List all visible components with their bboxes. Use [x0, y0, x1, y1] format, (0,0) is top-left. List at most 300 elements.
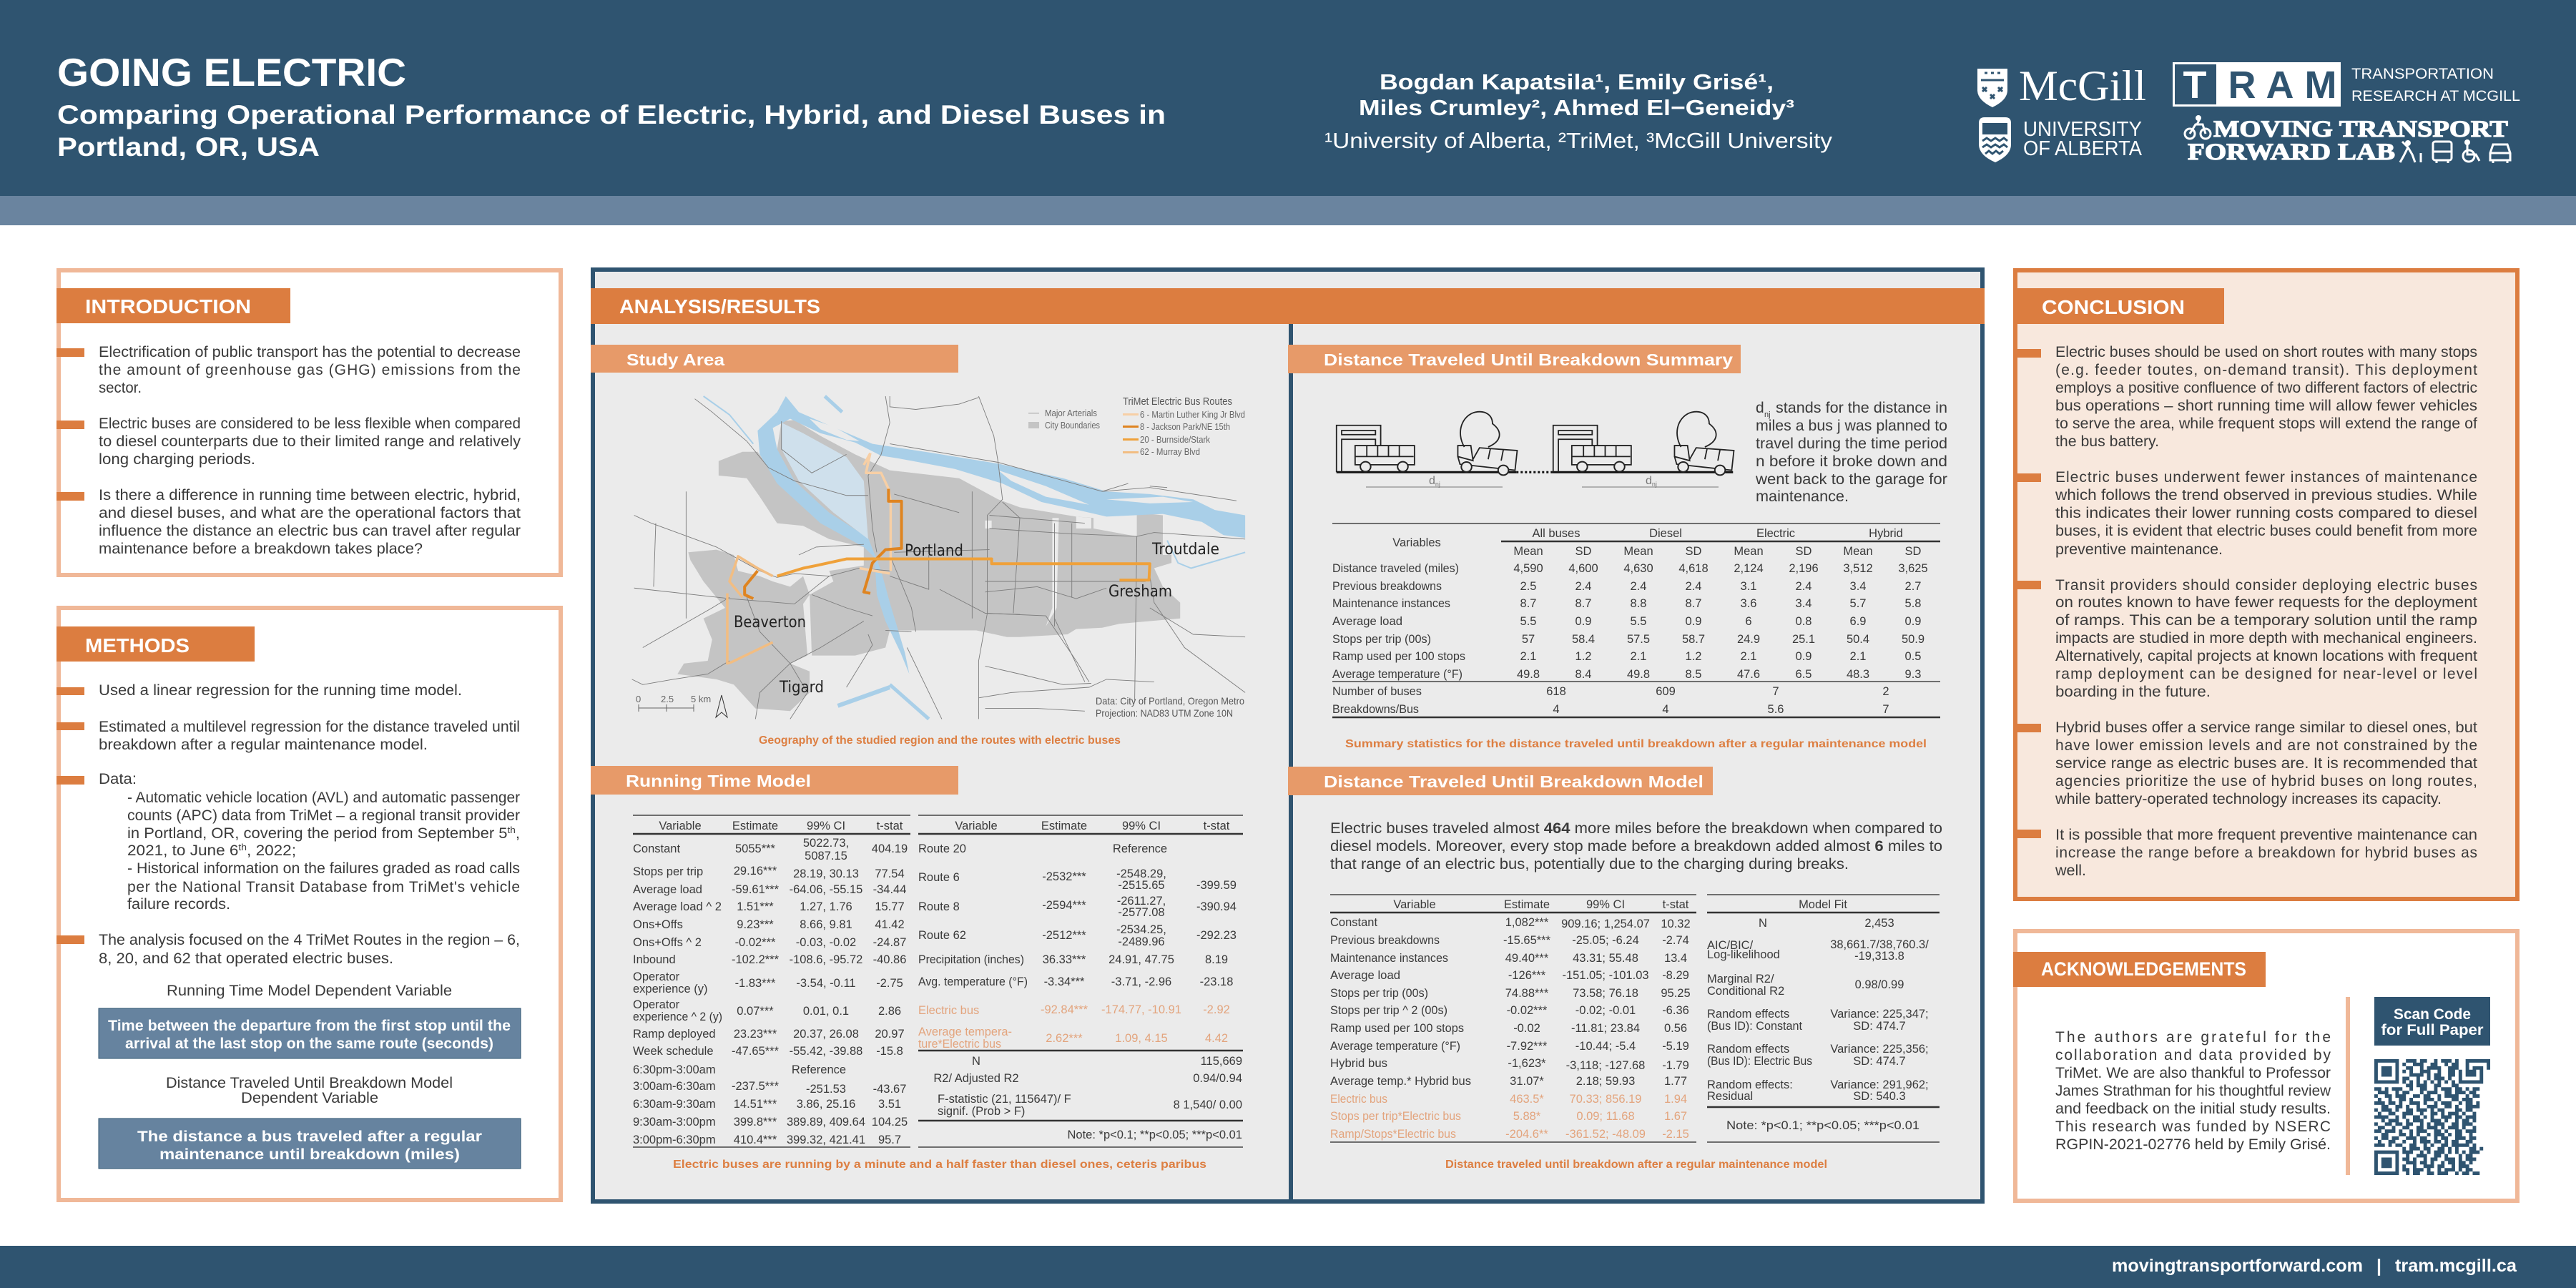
map place labels: Troutdale: [1151, 541, 1219, 559]
methods text: 2021, to June 6: [127, 842, 231, 859]
table: running time model left: 5022.73,: [803, 837, 849, 850]
conclusion text: on routes known to have fewer requests for the deployment: [2055, 594, 2477, 611]
introduction text: maintenance before a breakdown takes place?: [99, 541, 423, 557]
acknowledgements text: collaboration and data provided by: [2055, 1047, 2331, 1063]
table: summary statistics: 0.8: [1796, 615, 1811, 628]
table: summary statistics: 7: [1882, 703, 1889, 716]
table: distance model estimates: -7.92***: [1507, 1040, 1548, 1053]
table: running time model right: -2489.96: [1118, 935, 1165, 948]
table: running time model left: -2.75: [876, 977, 903, 990]
map credits: Projection: NAD83 UTM Zone 10N: [1096, 707, 1233, 719]
table: running time model left: 389.89, 409.64: [787, 1116, 865, 1129]
table: distance model estimates: 0.09; 11.68: [1576, 1110, 1635, 1123]
conclusion text: to serve the area, while frequent stops will extend the range of: [2055, 416, 2477, 432]
table: distance model fit: SD: 474.7: [1853, 1055, 1906, 1068]
table: summary statistics: 5.8: [1905, 597, 1921, 610]
table: distance model estimates: 70.33; 856.19: [1570, 1093, 1641, 1106]
introduction text: sector.: [99, 380, 142, 396]
table: summary statistics: 9.3: [1905, 668, 1921, 681]
diagram: bus trips between breakdowns: d: [1429, 475, 1435, 487]
table: running time model left: -237.5***: [732, 1080, 780, 1093]
caption: running time: Electric buses are running by a minute and a half faster than diesel ones, ceteris paribus: [673, 1159, 1206, 1171]
table: running time model left: 3:00pm-6:30pm: [633, 1134, 716, 1146]
table: distance model estimates: -361.52; -48.09: [1565, 1128, 1646, 1141]
table: summary statistics: Stops per trip (00s): [1332, 633, 1431, 646]
table: running time model left: 0.01, 0.1: [803, 1005, 849, 1018]
table: running time model left: 41.42: [875, 918, 905, 931]
table: running time model left: 29.16***: [734, 865, 777, 877]
map legend: 62 - Murray Blvd: [1140, 446, 1200, 457]
table: running time model right: Route 8: [918, 900, 960, 913]
authors: ¹University of Alberta, ²TriMet, ³McGill University: [1324, 128, 1833, 153]
conclusion text: of ramps. This can be a temporary solution until the ramp: [2055, 612, 2477, 629]
logo: Moving Transport Forward Lab: FORWARD LAB: [2188, 139, 2395, 165]
table: running time model left: 20.37, 26.08: [793, 1028, 859, 1041]
caption: summary statistics: Summary statistics for the distance traveled until breakdown after a regular maintenance model: [1345, 738, 1927, 750]
table: running time model right: -2.92: [1203, 1003, 1230, 1016]
table: running time model right: -2577.08: [1118, 906, 1165, 919]
table: running time model left: 3:00am-6:30am: [633, 1080, 716, 1093]
table: summary statistics: Electric: [1756, 527, 1795, 540]
table: distance model fit: AIC/BIC/: [1707, 939, 1754, 952]
table: summary statistics: 3.6: [1741, 597, 1756, 610]
heading: study area: Study Area: [626, 350, 724, 369]
table: summary statistics: 4,600: [1568, 562, 1598, 575]
route 6: [860, 453, 890, 574]
conclusion text: ramp deployment can be designed for near-level or level: [2055, 666, 2477, 682]
table: running time model right: Average tempera-: [918, 1026, 1012, 1038]
table: summary statistics: SD: [1686, 545, 1702, 558]
table: distance model estimates: -0.02; -0.01: [1575, 1004, 1636, 1017]
table: running time model right: -2512***: [1042, 929, 1086, 942]
table: summary statistics: Maintenance instances: [1332, 597, 1450, 610]
table: distance model fit: Model Fit: [1799, 898, 1847, 911]
table: running time model left: 0.07***: [737, 1005, 774, 1018]
table: running time model left: -47.65***: [732, 1045, 780, 1058]
heading: distance model: Distance Traveled Until Breakdown Model: [1324, 772, 1704, 791]
table: summary statistics: 58.4: [1572, 633, 1595, 646]
table: distance model estimates: Variable: [1393, 898, 1436, 911]
table: distance model estimates: Stops per trip (00s): [1330, 987, 1428, 1000]
table: running time model left: -59.61***: [732, 883, 780, 896]
table: summary statistics: Diesel: [1649, 527, 1682, 540]
callout: scan code: for Full Paper: [2381, 1022, 2483, 1038]
table: running time model right: Route 20: [918, 842, 966, 855]
conclusion text: Hybrid buses offer a service range similar to diesel ones, but: [2055, 719, 2477, 736]
table: running time model left: -102.2***: [732, 953, 780, 966]
table: summary statistics: 8.8: [1631, 597, 1646, 610]
table: distance model estimates: 0.56: [1664, 1022, 1687, 1035]
callout: running time dependent variable: Time between the departure from the first stop until the: [108, 1018, 511, 1034]
table: distance model estimates: -1.79: [1662, 1059, 1689, 1072]
table: running time model right: -399.59: [1196, 879, 1237, 892]
heading: conclusion: CONCLUSION: [2042, 296, 2185, 318]
table: distance model estimates: Constant: [1330, 916, 1377, 929]
table: running time model right: -23.18: [1200, 975, 1233, 988]
table: distance model estimates: 95.25: [1661, 987, 1691, 1000]
route 62: [727, 556, 773, 664]
methods text: in Portland, OR, covering the period from September 5: [127, 825, 491, 842]
text: distance model finding: Electric buses traveled almost 464 more miles before the breakdown when compared to: [1330, 820, 1942, 837]
diagram: bus trips between breakdowns: nj: [1652, 481, 1657, 488]
acknowledgements text: [2055, 1029, 2331, 1153]
table: running time model left: Estimate: [732, 820, 778, 832]
caption: map: Geography of the studied region and the routes with electric buses: [759, 734, 1121, 747]
map legend: 6 - Martin Luther King Jr Blvd: [1140, 409, 1245, 420]
acknowledgements text: and feedback on the initial study results.: [2055, 1101, 2331, 1117]
introduction text: Electrification of public transport has the potential to decrease: [99, 344, 521, 360]
map place labels: Portland: [905, 542, 963, 560]
table: summary statistics: 2.4: [1686, 580, 1701, 593]
table: summary statistics: SD: [1796, 545, 1812, 558]
table: distance model estimates: 1.77: [1664, 1075, 1687, 1088]
table: running time model right: -390.94: [1196, 900, 1237, 913]
map legend: Major Arterials: [1045, 408, 1097, 418]
table: running time model left: 3.86, 25.16: [797, 1098, 855, 1111]
table: summary statistics: 5.7: [1850, 597, 1866, 610]
table: running time model left: Operator: [633, 998, 680, 1011]
table: running time model right: 2.62***: [1046, 1032, 1083, 1045]
table: running time model left: 9:30am-3:00pm: [633, 1116, 716, 1129]
panel: analysis and results: [591, 270, 1985, 1201]
table: running time model left: Operator: [633, 970, 680, 983]
table: running time model left: 9.23***: [737, 918, 774, 931]
table: running time model left: 410.4***: [734, 1134, 777, 1146]
table: distance model estimates: Ramp used per 100 stops: [1330, 1022, 1464, 1035]
table: distance model fit: Residual: [1707, 1090, 1753, 1103]
table: distance model estimates: Average temp.* Hybrid bus: [1330, 1075, 1471, 1088]
conclusion text: Transit providers should consider deploying electric buses: [2055, 577, 2477, 594]
table: running time model right: -3.34***: [1044, 975, 1085, 988]
table: running time model left: -43.67: [873, 1083, 906, 1096]
introduction text: influence the distance an electric bus can travel after regular: [99, 523, 521, 539]
table: summary statistics: 2.1: [1850, 650, 1866, 663]
table: running time model right: -2594***: [1042, 899, 1086, 912]
table: running time model right: 24.91, 47.75: [1108, 953, 1174, 966]
table: running time model left: 6:30am-9:30am: [633, 1098, 716, 1111]
table: running time model left: -108.6, -95.72: [790, 953, 862, 966]
table: distance model estimates: -1,623*: [1508, 1057, 1546, 1070]
table: distance model estimates: [1330, 895, 1696, 1142]
table: distance model fit: Marginal R2/: [1707, 973, 1774, 985]
table: summary statistics: 3.4: [1796, 597, 1811, 610]
table: running time model left: Average load: [633, 883, 702, 896]
text: distance model finding: that range of an electric bus, potentially due to the charging during breaks.: [1330, 856, 1849, 872]
authors: Bogdan Kapatsila¹, Emily Grisé¹,: [1380, 69, 1774, 94]
conclusion text: It is possible that more frequent preventive maintenance can: [2055, 827, 2477, 843]
table: distance model estimates: -2.74: [1662, 934, 1689, 947]
table: summary statistics: Number of buses: [1332, 685, 1422, 698]
table: distance model fit: Random effects:: [1707, 1078, 1793, 1091]
conclusion text: agencies prioritize the use of hybrid buses on long routes,: [2055, 773, 2477, 790]
methods text: - Historical information on the failures graded as road calls: [127, 860, 520, 877]
table: distance model estimates: 49.40***: [1505, 952, 1549, 965]
table: distance model estimates: Stops per trip ^ 2 (00s): [1330, 1004, 1447, 1017]
table: summary statistics: Mean: [1513, 545, 1543, 558]
table: distance model fit: Variance: 291,962;: [1830, 1078, 1929, 1091]
title: Comparing Operational Performance of Electric, Hybrid, and Diesel Buses in: [57, 100, 1166, 129]
table: summary statistics: 2.1: [1631, 650, 1646, 663]
table: distance model estimates: -0.02***: [1507, 1004, 1548, 1017]
conclusion text: which follows the trend observed in previous studies. While: [2055, 487, 2477, 503]
table: summary statistics: Average temperature (°F): [1332, 668, 1462, 681]
table: running time model right: -292.23: [1196, 929, 1237, 942]
table: running time model left: 1.27, 1.76: [800, 900, 852, 913]
acknowledgements text: RGPIN-2021-02776 held by Emily Grisé.: [2055, 1136, 2331, 1153]
methods text: Distance Traveled Until Breakdown Model: [166, 1075, 453, 1091]
heading: introduction: [56, 288, 290, 323]
table: distance model estimates: -151.05; -101.03: [1562, 969, 1649, 982]
table: summary statistics: 50.4: [1847, 633, 1869, 646]
text: definition of distance: miles a bus j was planned to: [1756, 418, 1947, 434]
table: running time model left: -34.44: [873, 883, 906, 896]
map: study area with routes: [632, 395, 1245, 719]
table: distance model fit: Conditional R2: [1707, 985, 1784, 998]
introduction text: Electric buses are considered to be less flexible when compared: [99, 416, 521, 432]
table: summary statistics: Ramp used per 100 stops: [1332, 650, 1465, 663]
table: distance model estimates: 5.88*: [1513, 1110, 1541, 1123]
table: running time model right: -2548.29,: [1116, 867, 1166, 880]
methods text: The analysis focused on the 4 TriMet Routes in the region – 6,: [99, 932, 520, 948]
table: running time model left: -1.83***: [735, 977, 776, 990]
table: running time model right: Route 6: [918, 871, 960, 884]
table: summary statistics: 6: [1745, 615, 1752, 628]
table: running time model left: 3.51: [878, 1098, 901, 1111]
introduction text: long charging periods.: [99, 451, 255, 468]
table: distance model fit: SD: 540.3: [1853, 1090, 1906, 1103]
table: summary statistics: 2,124: [1734, 562, 1764, 575]
table: summary statistics: 7: [1772, 685, 1779, 698]
table: running time model right: 8 1,540/ 0.00: [1174, 1098, 1242, 1111]
table: summary statistics: 2.1: [1520, 650, 1536, 663]
text: distance model finding: [1330, 820, 1942, 872]
table: running time model right: Route 62: [918, 929, 966, 942]
title: GOING ELECTRIC: [57, 50, 406, 94]
table: running time model right: 1.09, 4.15: [1115, 1032, 1168, 1045]
table: summary statistics: Breakdowns/Bus: [1332, 703, 1419, 716]
table: summary statistics: 4: [1553, 703, 1560, 716]
table: summary statistics: 2.5: [1520, 580, 1536, 593]
table: running time model left: 5055***: [735, 842, 776, 855]
logo: TRAM: M: [2305, 64, 2336, 107]
table: running time model right: -2532***: [1042, 870, 1086, 883]
acknowledgements text: The authors are grateful for the: [2055, 1029, 2331, 1046]
table: distance model estimates: -11.81; 23.84: [1571, 1022, 1640, 1035]
table: distance model estimates: 10.32: [1661, 918, 1691, 930]
table: running time model left: 2.86: [878, 1005, 901, 1018]
table: summary statistics: 57.5: [1627, 633, 1650, 646]
table: distance model fit: N: [1759, 917, 1767, 930]
table: distance model estimates: -25.05; -6.24: [1572, 934, 1639, 947]
table: running time model right: Note: *p<0.1; **p<0.05; ***p<0.01: [1067, 1129, 1242, 1141]
footer: tram.mcgill.ca: [2395, 1256, 2517, 1276]
table: distance model estimates: 909.16; 1,254.07: [1561, 918, 1650, 930]
logo: Moving Transport Forward Lab: MOVING TRANSPORT: [2213, 117, 2508, 142]
methods text: Used a linear regression for the running time model.: [99, 682, 462, 699]
table: running time model right: t-stat: [1204, 820, 1230, 832]
methods text: [99, 682, 520, 1106]
conclusion text: impacts are studied in more depth with mechanical engineers.: [2055, 630, 2477, 647]
table: running time model right: 4.42: [1205, 1032, 1228, 1045]
table: distance model fit: Random effects: [1707, 1008, 1789, 1021]
conclusion text: this indicates their lower running costs compared to diesel: [2055, 505, 2477, 521]
table: distance model estimates: 73.58; 76.18: [1573, 987, 1638, 1000]
table: summary statistics: All buses: [1533, 527, 1580, 540]
conclusion text: have lower emission levels and are not constrained by the: [2055, 737, 2477, 754]
table: running time model left: 23.23***: [734, 1028, 777, 1041]
table: distance model fit: [1707, 895, 1940, 1142]
table: distance model estimates: -15.65***: [1503, 934, 1551, 947]
introduction text: and diesel buses, and what are the operational factors that: [99, 505, 521, 521]
table: summary statistics: 3.1: [1741, 580, 1756, 593]
heading: methods: [56, 626, 255, 662]
map legend: 8 - Jackson Park/NE 15th: [1140, 421, 1230, 432]
table: distance model fit: Variance: 225,347;: [1830, 1008, 1929, 1021]
table: summary statistics: 8.7: [1686, 597, 1701, 610]
methods text: Data:: [99, 771, 137, 787]
methods text: breakdown after a regular maintenance model.: [99, 737, 428, 753]
logo: TRAM: A: [2266, 64, 2294, 107]
table: distance model fit: (Bus ID): Constant: [1707, 1020, 1802, 1033]
conclusion text: well.: [2055, 862, 2086, 879]
table: running time model left: -0.03, -0.02: [796, 936, 856, 949]
table: distance model estimates: -6.36: [1662, 1004, 1689, 1017]
table: summary statistics: 0.9: [1575, 615, 1591, 628]
logo: TRAM: [2173, 62, 2520, 107]
conclusion text: while battery-operated technology increases its capacity.: [2055, 791, 2442, 807]
table: running time model left: -3.54, -0.11: [796, 977, 856, 990]
map legend: [1028, 395, 1245, 457]
table: distance model fit: 38,661.7/38,760.3/: [1830, 938, 1929, 951]
text: definition of distance: [1755, 400, 1947, 505]
table: summary statistics: 8.7: [1575, 597, 1591, 610]
header banner: [0, 0, 2576, 225]
bullet markers: [2013, 349, 2041, 838]
table: running time model right: F-statistic (21, 115647)/ F: [938, 1093, 1071, 1106]
table: running time model right: -2611.27,: [1117, 895, 1166, 908]
text: definition of distance: travel during the time period: [1756, 436, 1947, 452]
table: summary statistics: 57: [1522, 633, 1535, 646]
table: distance model fit: -19,313.8: [1854, 950, 1904, 963]
table: summary statistics: Variables: [1392, 536, 1441, 549]
table: running time model right: -2534.25,: [1116, 923, 1166, 936]
table: summary statistics: 1.2: [1575, 650, 1591, 663]
map scale bar and north arrow: 5 km: [691, 694, 711, 704]
map place labels: Beaverton: [734, 614, 806, 631]
methods text: failure records.: [127, 896, 230, 913]
table: distance model estimates: Maintenance instances: [1330, 952, 1448, 965]
table: distance model fit: Random effects: [1707, 1043, 1789, 1056]
table: summary statistics: Mean: [1843, 545, 1873, 558]
table: summary statistics: 4,630: [1623, 562, 1653, 575]
panel: acknowledgements: [2013, 931, 2517, 1201]
table: running time model right: [918, 815, 1243, 1147]
table: running time model left: 14.51***: [734, 1098, 777, 1111]
table: running time model left: 399.8***: [734, 1116, 777, 1129]
map geography: [632, 396, 1245, 719]
logo: University of Alberta: UNIVERSITY: [2023, 118, 2142, 141]
table: distance model estimates: Previous breakdowns: [1330, 934, 1440, 947]
table: running time model left: -24.87: [873, 936, 906, 949]
table: distance model fit: Variance: 225,356;: [1830, 1043, 1929, 1056]
table: running time model right: 115,669: [1201, 1055, 1242, 1068]
table: running time model left: 15.77: [875, 900, 905, 913]
callout: scan code: [2374, 997, 2490, 1046]
methods text: Dependent Variable: [241, 1090, 378, 1106]
conclusion text: [2055, 344, 2477, 879]
table: running time model left: Ons+Offs ^ 2: [633, 936, 702, 949]
introduction text: Is there a difference in running time between electric, hybrid,: [99, 487, 521, 503]
table: distance model estimates: -3,118; -127.68: [1566, 1059, 1645, 1072]
conclusion text: Alternatively, capital projects at known locations with frequent: [2055, 648, 2477, 664]
table: running time model right: 99% CI: [1122, 820, 1161, 832]
bullet markers: [56, 687, 84, 944]
table: running time model right: 36.33***: [1043, 953, 1086, 966]
table: running time model right: Variable: [955, 820, 998, 832]
table: distance model estimates: Hybrid bus: [1330, 1057, 1387, 1070]
table: running time model left: Week schedule: [633, 1045, 714, 1058]
authors: [1324, 69, 1833, 153]
table: summary statistics: 8.4: [1575, 668, 1591, 681]
text: definition of distance: stands for the distance in: [1776, 400, 1947, 416]
logo: University of Alberta: OF ALBERTA: [2023, 137, 2143, 160]
methods text: Estimated a multilevel regression for the distance traveled until: [99, 719, 520, 735]
conclusion text: buses, it is evident that electric buses could benefit from more: [2055, 523, 2477, 539]
table: summary statistics: 8.5: [1686, 668, 1701, 681]
table: running time model left: -0.02***: [735, 936, 776, 949]
table: running time model left: -64.06, -55.15: [790, 883, 862, 896]
diagram: bus trips between breakdowns: [1337, 412, 1734, 488]
methods text: th: [238, 842, 247, 852]
table: distance model fit: SD: 474.7: [1853, 1020, 1906, 1033]
conclusion text: the bus battery.: [2055, 433, 2159, 450]
table: running time model left: Inbound: [633, 953, 676, 966]
table: summary statistics: 0.9: [1905, 615, 1921, 628]
table: running time model left: -15.8: [876, 1045, 903, 1058]
title: Portland, OR, USA: [57, 132, 320, 162]
table: summary statistics: 3,625: [1898, 562, 1928, 575]
table: summary statistics: 47.6: [1737, 668, 1760, 681]
table: summary statistics: 58.7: [1682, 633, 1705, 646]
table: summary statistics: 618: [1546, 685, 1566, 698]
table: summary statistics: 2.4: [1575, 580, 1591, 593]
map credits: Data: City of Portland, Oregon Metro: [1096, 695, 1244, 707]
diagram: bus trips between breakdowns: nj: [1435, 481, 1440, 488]
methods text: th: [508, 825, 516, 835]
table: running time model left: 28.19, 30.13: [793, 867, 859, 880]
methods text: Running Time Model Dependent Variable: [167, 983, 452, 999]
table: summary statistics: 0.9: [1686, 615, 1701, 628]
text: definition of distance: nj: [1764, 411, 1771, 419]
heading: acknowledgements: ACKNOWLEDGEMENTS: [2041, 958, 2246, 980]
table: running time model left: 99% CI: [807, 820, 845, 832]
map legend: City Boundaries: [1045, 420, 1100, 431]
callout: running time dependent variable: arrival at the last stop on the same route (seconds): [125, 1036, 493, 1052]
route 8: [744, 489, 902, 599]
logo: TRAM: R: [2228, 64, 2256, 107]
table: running time model left: experience ^ 2 (y): [633, 1011, 722, 1023]
conclusion text: service range as electric buses are. It is recommended that: [2055, 755, 2477, 772]
route 20: [777, 559, 1150, 580]
table: running time model right: -2515.65: [1118, 879, 1165, 892]
table: summary statistics: 2.4: [1796, 580, 1811, 593]
logo: TRAM: T: [2183, 64, 2207, 107]
heading: introduction: INTRODUCTION: [85, 295, 251, 318]
table: summary statistics: 5.6: [1768, 703, 1784, 716]
methods text: ,: [516, 825, 520, 842]
table: running time model right: Precipitation (inches): [918, 953, 1024, 966]
heading: analysis results: ANALYSIS/RESULTS: [619, 295, 820, 318]
